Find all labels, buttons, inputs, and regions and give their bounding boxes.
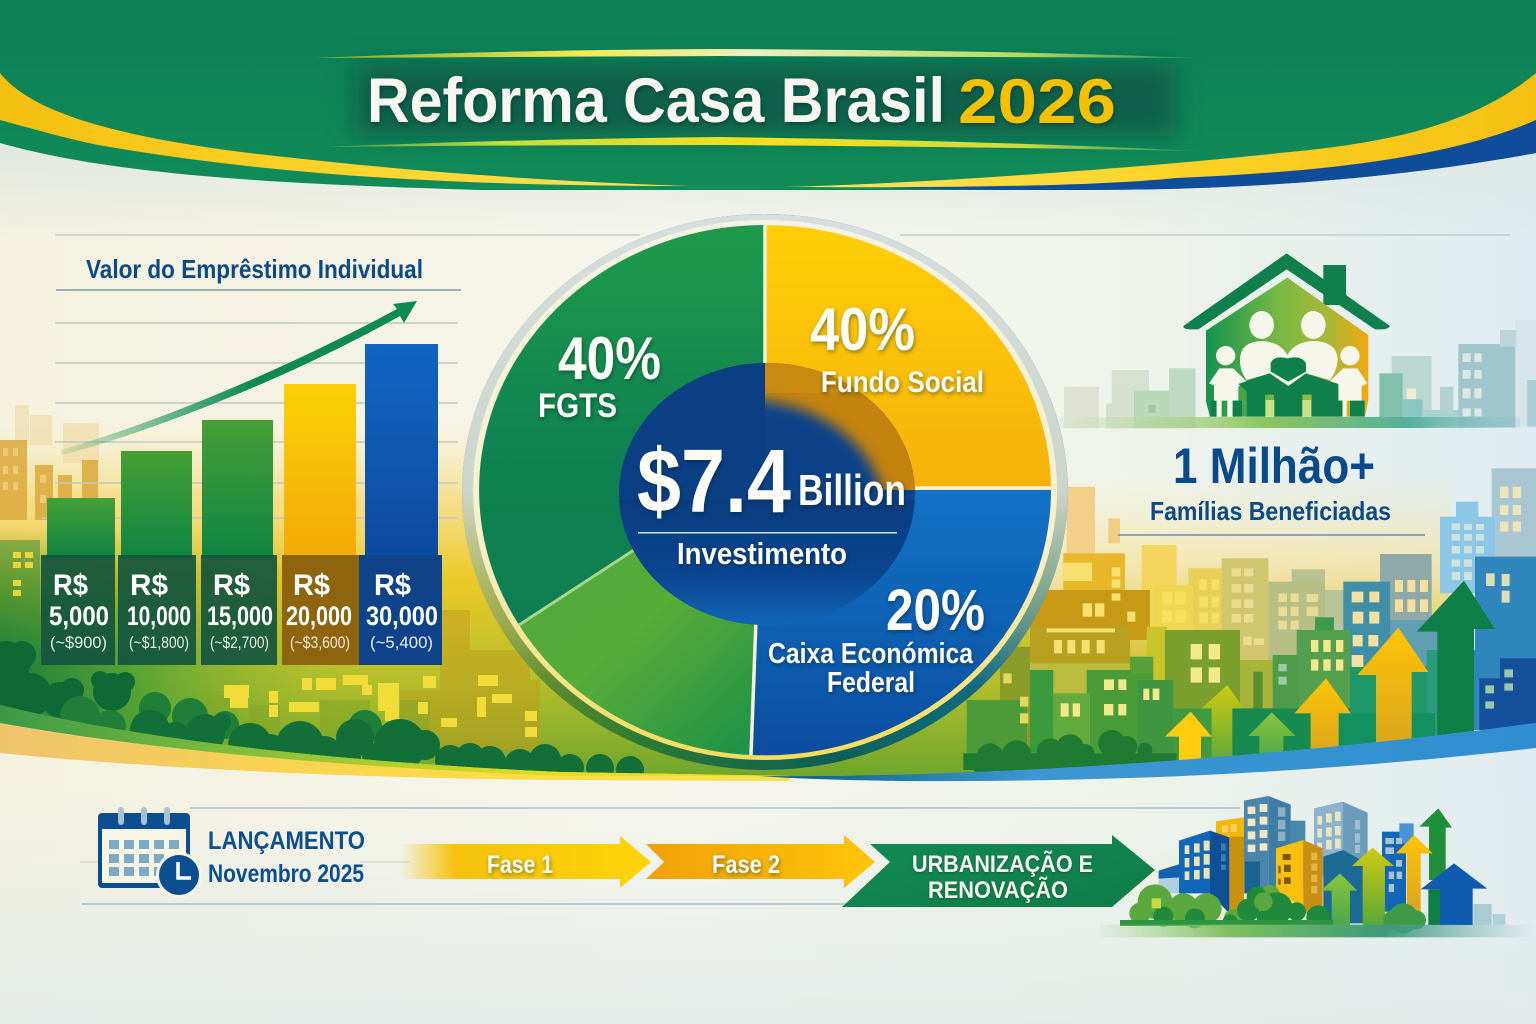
bar: 5,000	[47, 498, 115, 558]
value label: R$ 30,000: R$	[374, 569, 411, 602]
label: 20% Caixa: 20%	[886, 578, 985, 643]
label: 40% Fundo Social	[810, 296, 984, 399]
label: total investment: Investimento	[677, 536, 847, 571]
arrow: Fase 1	[400, 836, 651, 888]
bar chart: loan value	[41, 254, 461, 665]
launch heading: LANÇAMENTO	[208, 827, 365, 855]
label: 40% FGTS	[538, 325, 661, 425]
slice: Fundo Social	[765, 225, 1051, 490]
pie chart: funding sources	[462, 214, 1068, 770]
arrow: Urbanização e Renovação: RENOVAÇÃO	[928, 876, 1068, 904]
chart title: Valor do Emprêstimo Individual	[86, 254, 423, 284]
stat caption: Famílias Beneficiadas	[1150, 496, 1391, 526]
timeline: launch	[98, 807, 365, 898]
value label: R$ 20,000: R$	[293, 569, 330, 602]
arrow: Urbanização e Renovação	[842, 835, 1155, 907]
bar: 30,000	[365, 344, 438, 558]
swoosh ribbon: green left	[0, 705, 790, 776]
value label: R$ 20,000: 20,000	[286, 601, 352, 631]
label: 40% FGTS: 40%	[558, 325, 661, 392]
faint skyline behind house	[1064, 320, 1536, 428]
slice: Caixa	[751, 490, 1051, 755]
value label: R$ 15,000	[201, 555, 277, 665]
launch date: Novembro 2025	[208, 860, 364, 888]
label: 40% Fundo Social: Fundo Social	[821, 366, 984, 399]
title dark plate	[355, 64, 1175, 136]
label: 40% Fundo Social: 40%	[810, 296, 915, 363]
label: 40% FGTS: FGTS	[538, 387, 617, 425]
arrow: Urbanização e Renovação: URBANIZAÇÃO E	[912, 850, 1093, 878]
slice: FGTS	[479, 225, 765, 625]
center hub	[605, 363, 915, 630]
trend arrow	[60, 301, 417, 455]
ground strip	[1060, 417, 1520, 428]
right panel: families benefited	[1060, 253, 1536, 536]
arrows	[1321, 808, 1487, 925]
swoosh ribbon: yellow left	[0, 723, 790, 781]
value label: R$ 10,000	[118, 555, 196, 665]
bar: 15,000	[202, 420, 273, 558]
icon: house with family	[1183, 253, 1390, 417]
value label: R$ 30,000	[359, 555, 442, 665]
title year: 2026	[958, 67, 1116, 137]
city skyline: left	[0, 405, 1048, 784]
label: total investment: $7.4	[637, 432, 791, 532]
background grid rules	[55, 234, 1510, 236]
bottom rules	[82, 808, 1240, 904]
label: 20% Caixa: Federal	[827, 667, 915, 699]
value label: R$ 15,000: (~$2,700)	[210, 633, 269, 652]
value label: R$ 20,000: (~$3,600)	[290, 633, 350, 652]
value label: R$ 20,000	[282, 555, 359, 665]
header ribbon: yellow right	[784, 73, 1536, 187]
stat: 1 million: 1 Milhão+	[1173, 438, 1375, 494]
value label: R$ 5,000: 5,000	[49, 601, 109, 631]
value label: R$ 5,000: (~$900)	[50, 633, 107, 652]
header ribbon: blue right	[880, 118, 1536, 190]
label: 20% Caixa: Caixa Económica	[768, 638, 974, 670]
arrow: Fase 2: Fase 2	[712, 851, 780, 879]
value label: R$ 30,000: (~5,400)	[370, 633, 433, 652]
timeline arrows	[400, 835, 1155, 907]
header ribbon: yellow left	[0, 73, 690, 186]
trees	[1120, 884, 1426, 933]
label: total investment	[637, 432, 906, 571]
swoosh ribbon: blue right	[760, 723, 1536, 781]
slice: unlabelled green	[519, 546, 756, 755]
label: total investment: Billion	[798, 466, 906, 515]
value label: R$ 5,000: R$	[53, 569, 88, 602]
value label: R$ 10,000: R$	[130, 569, 168, 602]
value label: R$ 15,000: 15,000	[207, 601, 273, 631]
value label: R$ 30,000: 30,000	[366, 601, 438, 631]
header banner	[0, 0, 1536, 190]
bar: 20,000	[284, 384, 356, 558]
icon: renewed city with arrows	[1100, 796, 1536, 937]
title accent line: bottom	[323, 137, 1196, 151]
title accent line: top	[314, 49, 1196, 58]
value label: R$ 10,000: (~$1,800)	[129, 633, 189, 652]
bar: 10,000	[121, 451, 192, 558]
label: 20% Caixa	[768, 578, 985, 699]
icon: calendar with clock	[98, 807, 202, 898]
city skyline: right	[963, 468, 1536, 770]
value label: R$ 15,000: R$	[213, 569, 250, 602]
ground	[1100, 925, 1536, 937]
arrows rising: right city	[1165, 581, 1495, 767]
arrow: Fase 1: Fase 1	[487, 851, 553, 879]
value label: R$ 10,000: 10,000	[127, 601, 191, 631]
title text: Reforma Casa Brasil	[367, 66, 945, 136]
value label: R$ 5,000	[41, 555, 115, 665]
far towers	[1159, 796, 1414, 923]
arrow: Fase 2	[646, 835, 875, 888]
